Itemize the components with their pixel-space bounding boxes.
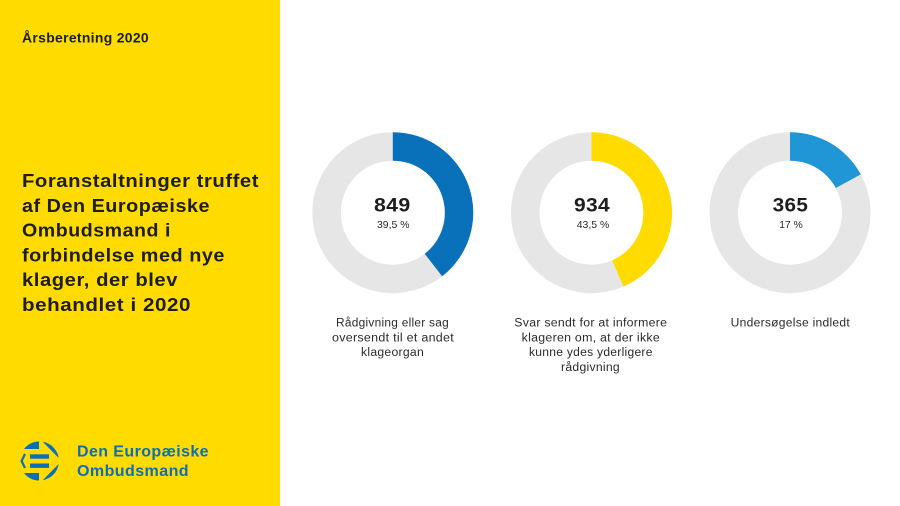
label: Svar sendt for at informere [514, 318, 667, 330]
logo wordmark: Den Europæiske [77, 444, 209, 461]
title: af Den Europæiske [22, 195, 210, 216]
title: forbindelse med nye [22, 244, 225, 265]
title: behandlet i 2020 [22, 294, 191, 315]
percent 17 %: 17 % [779, 219, 803, 231]
title: klager, der blev [22, 269, 178, 290]
panel: donut 934 [514, 132, 672, 374]
percent 43,5 %: 43,5 % [577, 219, 609, 231]
icon: ombudsman logo [22, 442, 59, 480]
label: oversendt til et andet [332, 332, 455, 344]
value 849: 849 [374, 195, 410, 217]
donut chart 43,5 % [525, 132, 672, 287]
logo wordmark [77, 444, 209, 480]
label [514, 318, 667, 374]
report label: Årsberetning 2020 [22, 30, 149, 46]
label: Rådgivning eller sag [336, 318, 449, 330]
label: Undersøgelse indledt [731, 318, 851, 330]
value 365: 365 [773, 195, 808, 217]
title: Ombudsmand i [22, 220, 171, 241]
donut chart 39,5 % [327, 132, 473, 279]
panel: donut 365 [724, 132, 861, 330]
label [332, 318, 455, 359]
label: kunne ydes yderligere [529, 347, 653, 359]
label: rådgivning [561, 362, 620, 374]
label: klageren om, at der ikke [522, 332, 660, 344]
value 934: 934 [574, 195, 610, 217]
panel: yellow sidebar [0, 0, 280, 506]
title [22, 170, 259, 315]
label: klageorgan [361, 347, 424, 359]
donut chart 17 % [724, 132, 861, 279]
percent 39,5 %: 39,5 % [377, 219, 410, 231]
logo wordmark: Ombudsmand [77, 463, 189, 480]
panel: donut 849 [327, 132, 473, 359]
title: Foranstaltninger truffet [22, 170, 259, 191]
